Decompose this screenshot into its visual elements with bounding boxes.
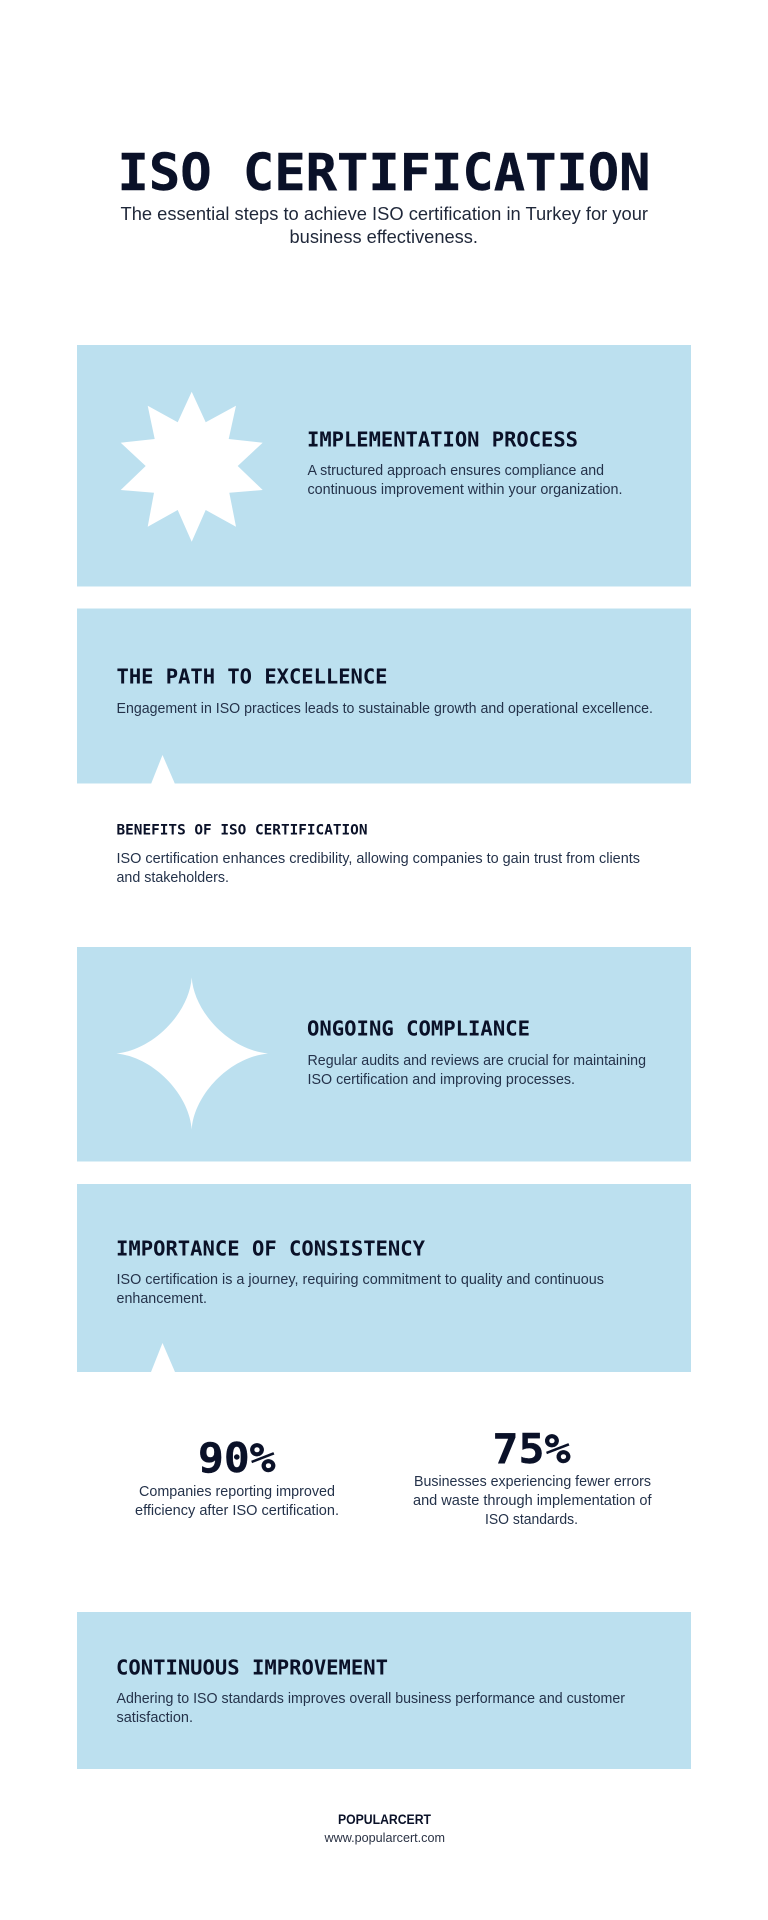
text: 75% caption: Businesses experiencing fewer errors (414, 1474, 651, 1490)
footer brand: POPULARCERT (338, 1812, 432, 1827)
heading: the path to excellence: THE PATH TO EXCELLENCE (116, 664, 388, 688)
text: continuous improvement body: satisfaction. (116, 1710, 193, 1726)
text: implementation process body (308, 463, 622, 498)
text: path to excellence body: Engagement in ISO practices leads to sustainable growth and operational excellence. (116, 701, 653, 717)
text: 75% caption (413, 1474, 652, 1528)
text: implementation process body: continuous improvement within your organization. (308, 482, 622, 498)
icon: pointer notch (151, 1343, 175, 1372)
text: ongoing compliance body (308, 1053, 646, 1088)
text: ongoing compliance body: Regular audits and reviews are crucial for maintaining (308, 1053, 646, 1069)
footer (324, 1812, 445, 1845)
text: continuous improvement body: Adhering to ISO standards improves overall business performance and customer (116, 1691, 625, 1707)
stat: 90 percent (135, 1434, 339, 1519)
text: benefits body: and stakeholders. (116, 870, 229, 886)
stat: 75 percent (413, 1425, 652, 1528)
heading: implementation process: IMPLEMENTATION PROCESS (307, 428, 578, 452)
heading: importance of consistency: IMPORTANCE OF CONSISTENCY (116, 1236, 425, 1260)
subtitle: The essential steps to achieve ISO certification in Turkey for your (120, 203, 648, 224)
text: 90% caption: efficiency after ISO certification. (135, 1503, 339, 1519)
section: benefits of iso certification (116, 822, 640, 886)
text: 90% caption (135, 1484, 339, 1519)
text: benefits body (116, 851, 640, 886)
text: 75% caption: ISO standards. (485, 1512, 578, 1528)
panel: implementation process (77, 345, 691, 586)
number: 90%: 90% (198, 1434, 276, 1482)
panel: the path to excellence (77, 608, 691, 784)
text: benefits body: ISO certification enhances credibility, allowing companies to gain trust from clients (116, 851, 640, 867)
icon: ten-point star (121, 392, 263, 542)
icon: four-point sparkle (116, 978, 268, 1130)
subtitle: business effectiveness. (290, 226, 478, 247)
subtitle (120, 203, 648, 247)
text: continuous improvement body (116, 1691, 625, 1726)
panel: continuous improvement (77, 1612, 691, 1769)
text: 90% caption: Companies reporting improved (139, 1484, 335, 1500)
panel: importance of consistency (77, 1184, 691, 1372)
icon: pointer notch (151, 755, 175, 784)
heading: ongoing compliance: ONGOING COMPLIANCE (307, 1016, 530, 1040)
number: 75%: 75% (492, 1425, 571, 1473)
title: ISO CERTIFICATION (118, 144, 650, 203)
text: implementation process body: A structured approach ensures compliance and (308, 463, 604, 479)
footer url: www.popularcert.com (324, 1830, 445, 1845)
text: consistency body: enhancement. (116, 1291, 207, 1307)
text: consistency body: ISO certification is a journey, requiring commitment to quality and continuous (116, 1272, 604, 1288)
heading: benefits: BENEFITS OF ISO CERTIFICATION (116, 822, 368, 838)
text: consistency body (116, 1272, 604, 1307)
text: ongoing compliance body: ISO certification and improving processes. (308, 1072, 575, 1088)
panel: ongoing compliance (77, 947, 691, 1162)
heading: continuous improvement: CONTINUOUS IMPROVEMENT (116, 1656, 388, 1680)
text: 75% caption: and waste through implementation of (413, 1493, 652, 1509)
